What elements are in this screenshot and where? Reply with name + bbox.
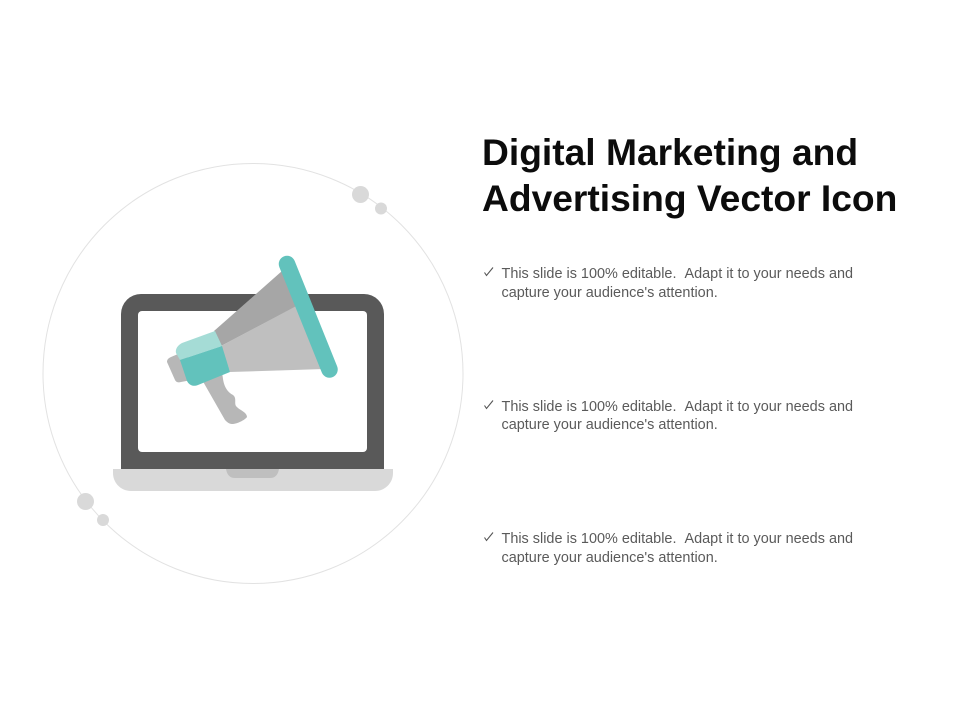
megaphone cone upper	[214, 271, 301, 346]
icon: megaphone	[167, 264, 330, 424]
bullet 1: capture your audience's attention.	[502, 285, 718, 301]
bullet 2: capture your audience's attention.	[502, 417, 718, 433]
bullet 3: capture your audience's attention.	[502, 550, 718, 566]
megaphone back cap	[167, 351, 197, 382]
megaphone collar light	[176, 331, 222, 360]
illustration: laptop with megaphone in circle	[42, 163, 464, 584]
upper right dots	[352, 186, 387, 214]
icon: laptop	[113, 294, 393, 491]
laptop notch	[226, 469, 279, 478]
bullet 3: This slide is 100% editable. Adapt it to your needs and	[502, 531, 853, 547]
megaphone handle	[201, 372, 247, 424]
title: Digital Marketing and	[482, 131, 858, 173]
megaphone rim	[287, 264, 330, 370]
laptop frame	[121, 294, 384, 469]
bullet 2	[484, 398, 853, 433]
bullet 3	[484, 531, 853, 566]
bullet 1: This slide is 100% editable. Adapt it to your needs and	[502, 266, 853, 282]
lower left dots	[77, 493, 109, 526]
megaphone collar teal	[180, 346, 230, 386]
laptop screen	[138, 311, 367, 452]
title	[482, 131, 897, 219]
decorative circle ring	[43, 164, 463, 584]
laptop base	[113, 469, 393, 491]
megaphone cone lower	[221, 304, 325, 372]
bullet 2: This slide is 100% editable. Adapt it to your needs and	[502, 398, 853, 414]
bullet 1	[484, 266, 853, 301]
title: Advertising Vector Icon	[482, 177, 897, 219]
